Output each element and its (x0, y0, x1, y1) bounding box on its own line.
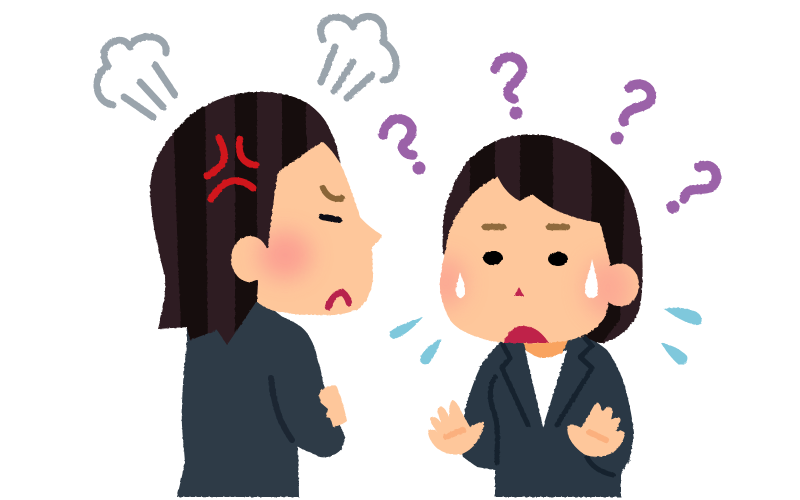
illustration: angry coworker and confused coworker (94, 12, 722, 498)
hair (442, 134, 643, 344)
hair (150, 92, 340, 345)
frown (328, 292, 349, 307)
eyebrows (485, 224, 567, 230)
drop 3 (664, 308, 702, 325)
question mark 3 (610, 84, 652, 144)
angry woman (140, 85, 382, 497)
suit jacket (462, 337, 634, 497)
steam puff: left (97, 37, 175, 117)
arm crease (271, 378, 292, 440)
drop 2 (420, 339, 441, 364)
question mark 4 (666, 165, 716, 214)
confused woman (426, 130, 650, 497)
eyes (483, 251, 568, 266)
neck (523, 340, 568, 359)
closed eye and brow (322, 188, 342, 220)
shirt (525, 350, 567, 427)
steam puff: right (321, 16, 396, 98)
right hand (567, 403, 625, 457)
blush (259, 231, 311, 279)
worry drops (390, 308, 702, 365)
left hand (428, 400, 484, 455)
left character steam puffs (97, 16, 396, 117)
drop 1 (390, 317, 423, 339)
drop 4 (661, 343, 687, 365)
question mark 2 (495, 57, 523, 120)
face (440, 177, 610, 343)
body: dark sweater (177, 298, 347, 497)
blush (426, 256, 632, 318)
ear (601, 264, 639, 306)
sweat drops (456, 259, 598, 298)
nose (514, 287, 524, 296)
question mark 1 (383, 119, 426, 174)
mouth (503, 326, 549, 343)
hand (319, 385, 347, 427)
question marks (383, 57, 716, 213)
ear (231, 236, 269, 282)
face (257, 142, 382, 315)
anger mark (207, 138, 256, 199)
lapels and creases (490, 338, 613, 475)
